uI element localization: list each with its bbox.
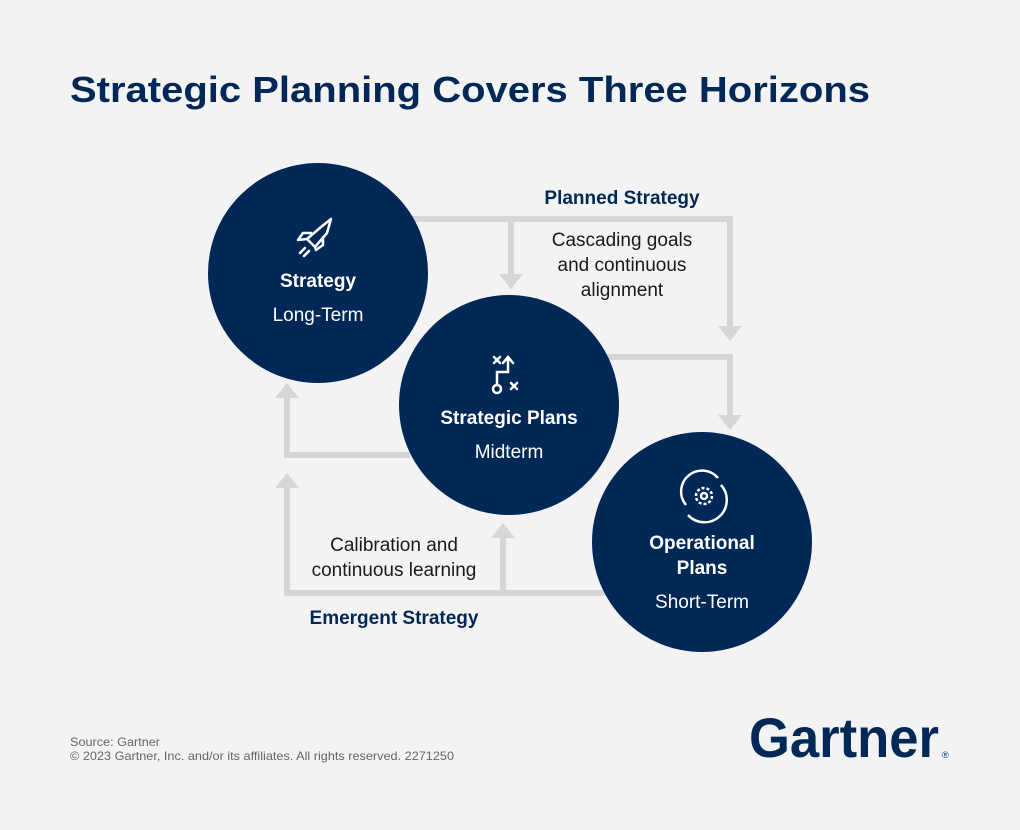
circle: strategy: [208, 163, 428, 383]
circle: operational plans: [592, 432, 812, 652]
circle: operational plans: Plans: [677, 558, 727, 579]
footer: source: © 2023 Gartner, Inc. and/or its affiliates. All rights reserved. 2271250: [70, 749, 454, 763]
circle: strategy: Long-Term: [273, 305, 363, 326]
text: cascading goals: Cascading goals: [552, 230, 692, 251]
footer: source: [70, 735, 454, 763]
circle: strategy: Strategy: [280, 271, 356, 292]
text: calibration: continuous learning: [312, 560, 476, 581]
text: calibration: Calibration and: [330, 535, 458, 556]
circle: strategic plans: [399, 295, 619, 515]
icon: gear cycle: [681, 471, 727, 522]
circle: operational plans: Operational: [649, 533, 755, 554]
text: cascading goals: alignment: [581, 280, 664, 301]
text: cascading goals: and continuous: [558, 255, 686, 276]
circle: operational plans: Short-Term: [655, 592, 749, 613]
text: cascading goals: [552, 230, 692, 301]
icon: play diagram: [493, 357, 517, 393]
footer: source: Source: Gartner: [70, 735, 160, 749]
arrows: planned strategy: [287, 219, 730, 593]
logo: Gartner: ®: [942, 750, 949, 760]
logo: Gartner: Gartner: [749, 706, 939, 769]
icon: rocket: [298, 219, 331, 256]
circle: strategic plans: Midterm: [475, 442, 543, 463]
arrowheads: [275, 274, 742, 538]
title: Strategic Planning Covers Three Horizons: [70, 69, 870, 110]
label: emergent strategy: Emergent Strategy: [310, 608, 479, 629]
circle: strategic plans: Strategic Plans: [440, 408, 578, 429]
label: planned strategy: Planned Strategy: [544, 188, 700, 209]
text: calibration: [312, 535, 476, 581]
